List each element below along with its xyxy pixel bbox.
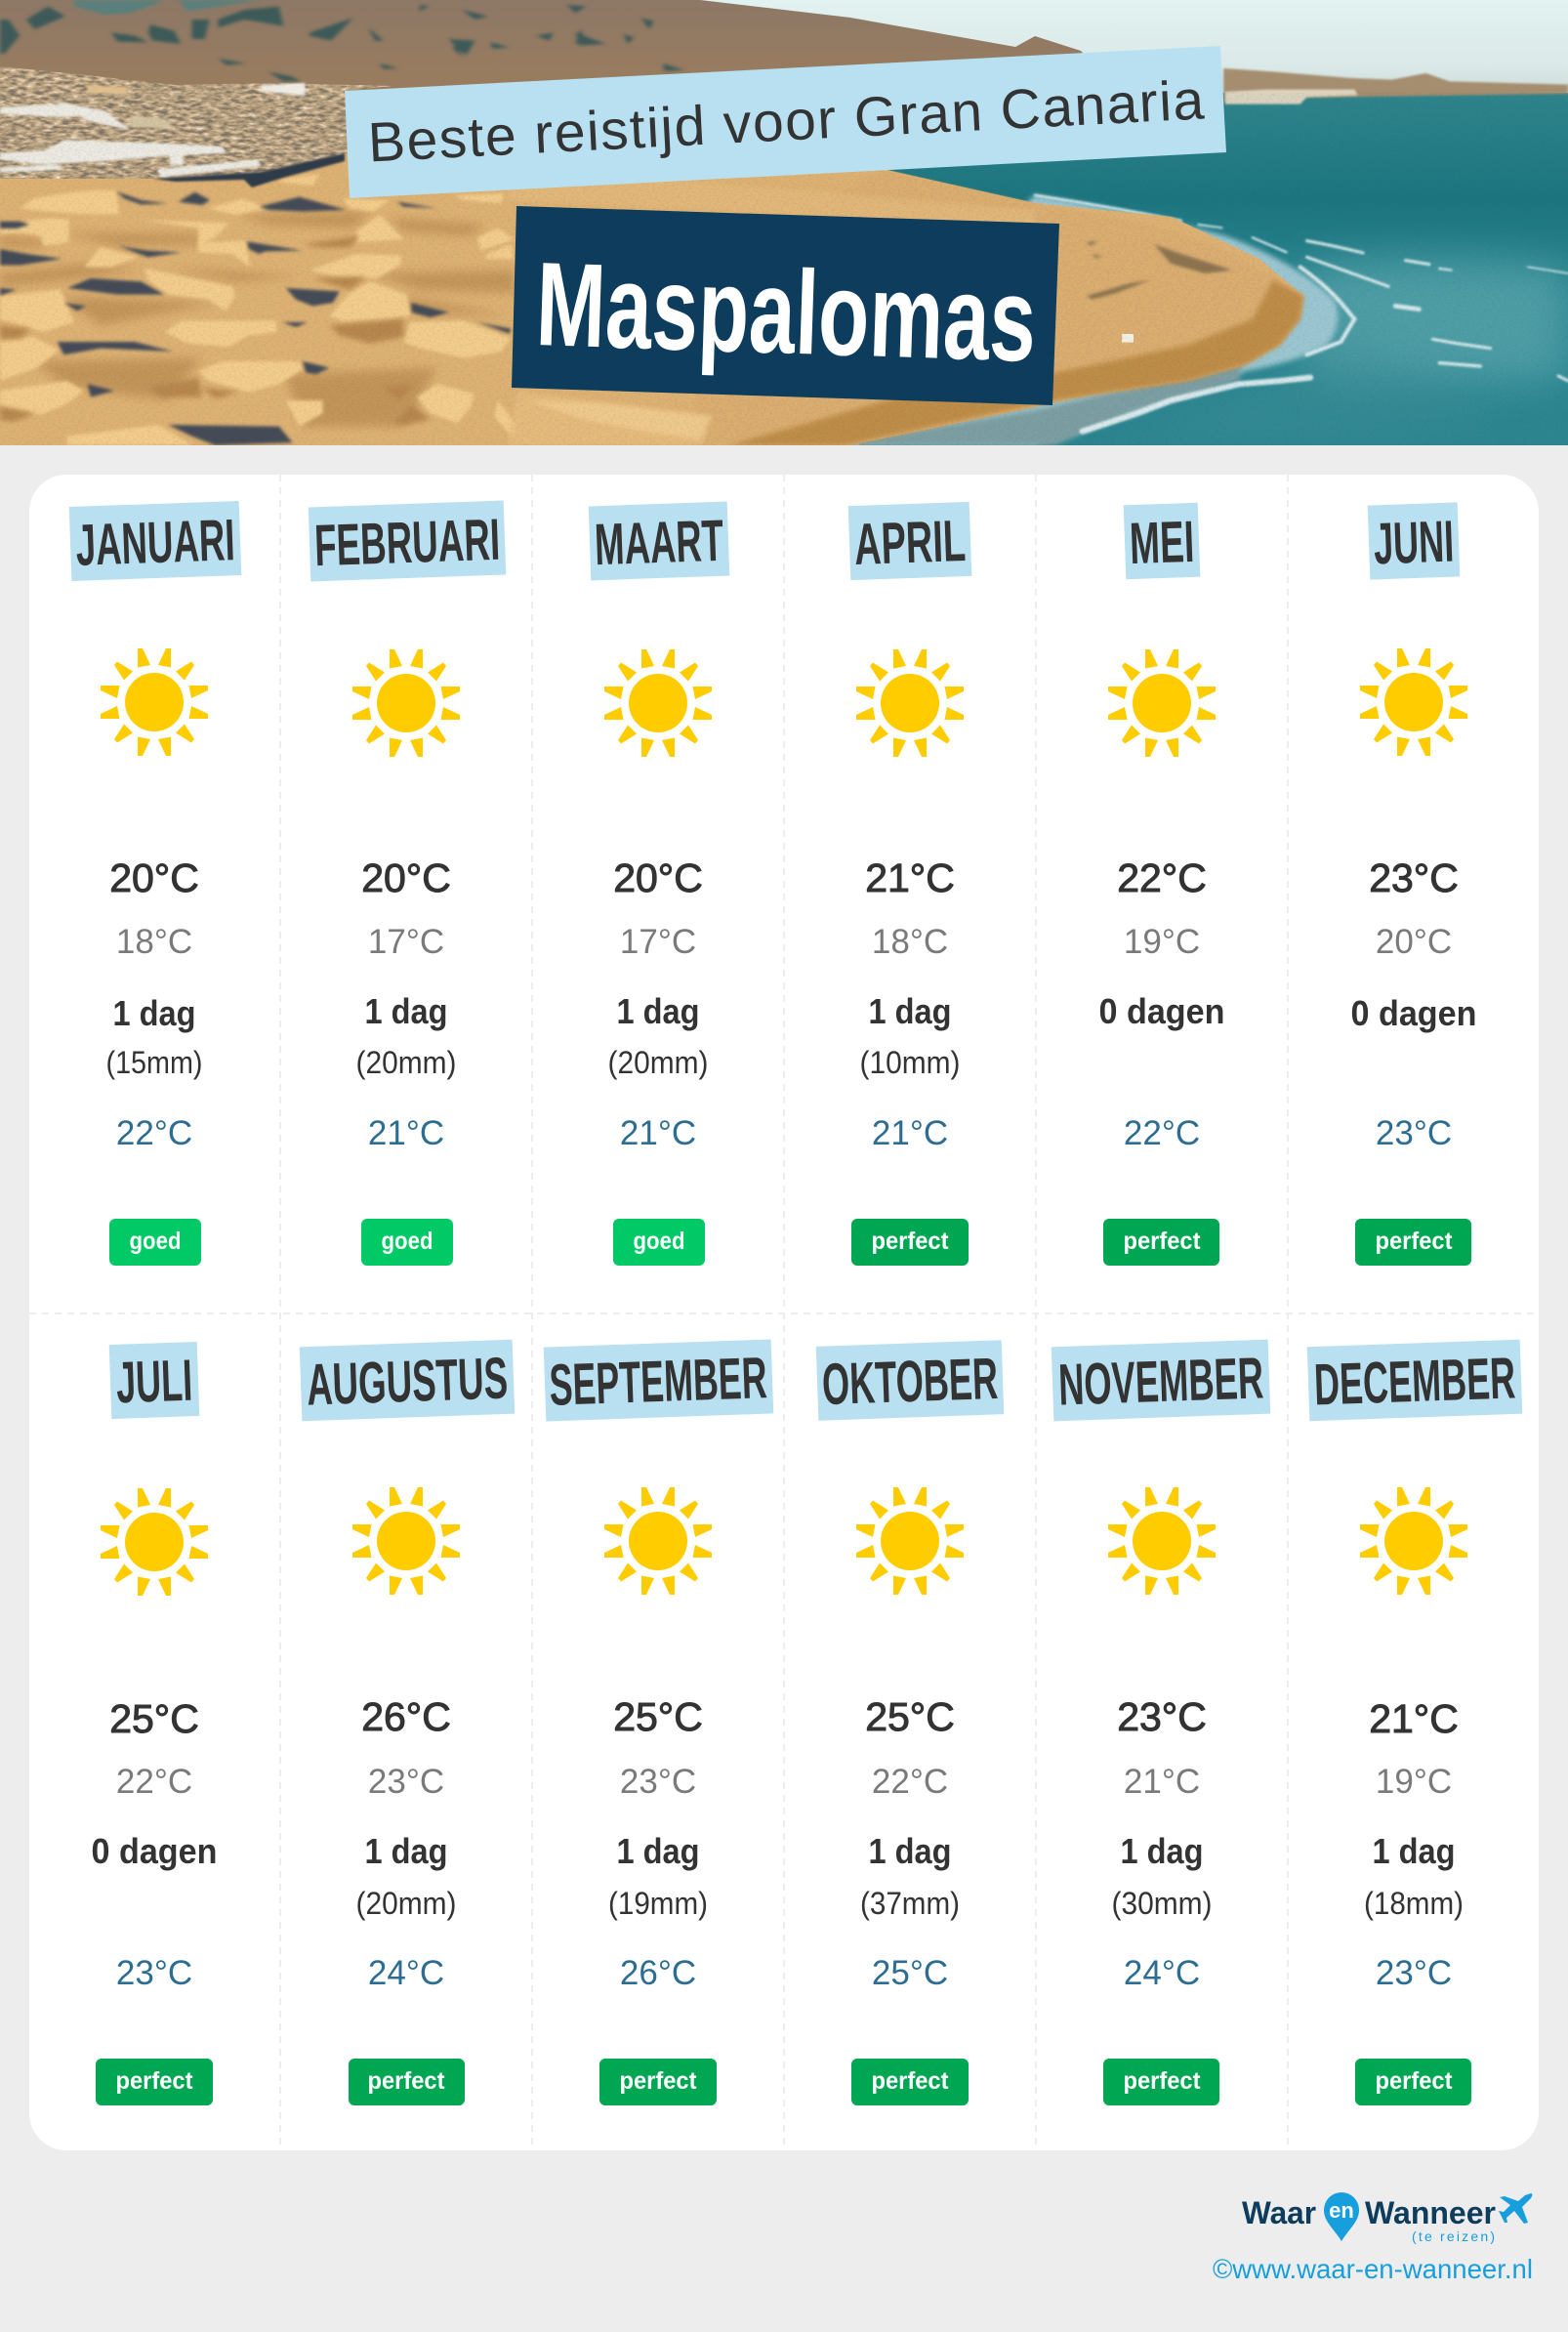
icon: sun bbox=[1108, 1487, 1216, 1595]
sea temperature: 22°C bbox=[1124, 1114, 1200, 1152]
right-hand beach bbox=[695, 169, 1303, 445]
sea temperature: 23°C bbox=[116, 1954, 192, 1992]
rating: perfect: perfect bbox=[1375, 2067, 1453, 2095]
month: juni bbox=[1351, 502, 1476, 1266]
air temperature day: 22°C bbox=[1117, 855, 1207, 900]
rating: perfect bbox=[1103, 1219, 1219, 1266]
month: februari bbox=[309, 501, 506, 1266]
label: maart: MAART bbox=[594, 508, 724, 577]
title banner: Maspalomas bbox=[512, 206, 1059, 405]
icon: sun bbox=[604, 1487, 712, 1595]
sea temperature: 25°C bbox=[872, 1954, 948, 1992]
month: april bbox=[848, 502, 971, 1266]
air temperature night: 19°C bbox=[1376, 1763, 1452, 1801]
label: oktober: OKTOBER bbox=[821, 1346, 999, 1417]
month: september bbox=[544, 1339, 773, 2105]
header photo: Maspalomas dunes and coast bbox=[0, 0, 1568, 445]
rainfall: (37mm) bbox=[860, 1886, 960, 1921]
label: januari bbox=[69, 501, 241, 581]
air temperature day: 21°C bbox=[1369, 1696, 1459, 1741]
label: augustus bbox=[300, 1340, 515, 1421]
label: april bbox=[848, 502, 971, 580]
title banner: Beste reistijd voor Gran Canaria bbox=[345, 46, 1226, 198]
air temperature night: 19°C bbox=[1124, 923, 1200, 961]
logo: Waar en Wanneer bbox=[1242, 2192, 1532, 2244]
mountains bbox=[0, 0, 1084, 105]
air temperature night: 23°C bbox=[368, 1763, 444, 1801]
rating: perfect: perfect bbox=[619, 2067, 697, 2095]
icon: airplane bbox=[1499, 2193, 1532, 2224]
sea temperature: 21°C bbox=[872, 1114, 948, 1152]
air temperature day: 20°C bbox=[361, 855, 451, 900]
icon: location pin bbox=[1324, 2192, 1359, 2241]
rating: perfect bbox=[1355, 2059, 1471, 2105]
label: augustus: AUGUSTUS bbox=[306, 1345, 509, 1418]
rainfall: (18mm) bbox=[1364, 1886, 1464, 1921]
title banner: Beste reistijd voor Gran Canaria: Beste reistijd voor Gran Canaria bbox=[366, 68, 1206, 174]
rain days: 1 dag bbox=[365, 1831, 447, 1871]
rain days: 1 dag bbox=[1121, 1831, 1203, 1871]
distant coast bbox=[1223, 68, 1568, 103]
rating: perfect bbox=[1355, 1219, 1471, 1266]
month: mei bbox=[1099, 503, 1224, 1266]
rain days: 1 dag bbox=[1373, 1831, 1455, 1871]
website url: ©www.waar-en-wanneer.nl bbox=[1213, 2254, 1533, 2284]
rating: perfect bbox=[851, 1219, 969, 1266]
icon: sun bbox=[1360, 1487, 1467, 1595]
air temperature night: 18°C bbox=[872, 923, 948, 961]
air temperature day: 25°C bbox=[109, 1696, 199, 1741]
rating: goed bbox=[109, 1219, 201, 1266]
label: juli bbox=[109, 1342, 199, 1419]
rating: perfect bbox=[1103, 2059, 1219, 2105]
air temperature day: 20°C bbox=[613, 855, 703, 900]
label: februari: FEBRUARI bbox=[313, 507, 501, 578]
rainfall: (19mm) bbox=[608, 1886, 708, 1921]
label: mei: MEI bbox=[1129, 509, 1195, 576]
rain days: 1 dag bbox=[617, 1831, 699, 1871]
rating: goed: goed bbox=[381, 1228, 433, 1255]
sea temperature: 21°C bbox=[368, 1114, 444, 1152]
air temperature day: 20°C bbox=[109, 855, 199, 900]
label: september bbox=[544, 1339, 773, 1422]
rainfall: (20mm) bbox=[355, 1886, 457, 1921]
icon: sun bbox=[1108, 649, 1216, 757]
rating: goed bbox=[613, 1219, 705, 1266]
month: januari bbox=[69, 501, 241, 1266]
rating: perfect bbox=[851, 2059, 969, 2105]
rating: perfect: perfect bbox=[871, 2067, 949, 2095]
title banner: Maspalomas: Maspalomas bbox=[534, 237, 1038, 387]
label: november bbox=[1052, 1340, 1270, 1421]
sea temperature: 21°C bbox=[620, 1114, 696, 1152]
rating: perfect: perfect bbox=[367, 2067, 445, 2095]
rating: perfect: perfect bbox=[1123, 1228, 1201, 1255]
rain days: 1 dag bbox=[869, 1831, 951, 1871]
photo grain bbox=[0, 93, 1568, 445]
label: september: SEPTEMBER bbox=[548, 1345, 768, 1418]
label: juni bbox=[1368, 502, 1460, 580]
air temperature day: 23°C bbox=[1369, 855, 1459, 900]
icon: sun bbox=[1360, 648, 1467, 756]
rainfall: (10mm) bbox=[859, 1045, 961, 1080]
logo: Waar en Wanneer: Wanneer bbox=[1365, 2195, 1496, 2230]
sea temperature: 24°C bbox=[1124, 1954, 1200, 1992]
rain days: 0 dagen bbox=[1351, 993, 1476, 1033]
air temperature day: 23°C bbox=[1117, 1694, 1207, 1739]
sea temperature: 23°C bbox=[1376, 1954, 1452, 1992]
rainfall: (30mm) bbox=[1111, 1886, 1213, 1921]
icon: sun bbox=[856, 649, 964, 757]
icon: location pin: en bbox=[1329, 2198, 1354, 2223]
air temperature day: 25°C bbox=[865, 1694, 955, 1739]
rain days: 1 dag bbox=[113, 993, 195, 1033]
white surf lines bbox=[1035, 195, 1568, 432]
rating: goed: goed bbox=[633, 1228, 685, 1255]
air temperature night: 17°C bbox=[620, 923, 696, 961]
icon: sun bbox=[604, 649, 712, 757]
label: juli: JULI bbox=[115, 1348, 193, 1415]
dunes bbox=[0, 146, 1303, 445]
air temperature night: 20°C bbox=[1376, 923, 1452, 961]
rating: perfect: perfect bbox=[871, 1228, 949, 1255]
shallow water bbox=[831, 195, 1338, 445]
rainfall: (20mm) bbox=[355, 1045, 457, 1080]
icon: sun bbox=[352, 649, 460, 757]
month: maart bbox=[589, 502, 729, 1266]
icon: sun bbox=[856, 1487, 964, 1595]
rain days: 1 dag bbox=[617, 991, 699, 1031]
month: juli bbox=[92, 1342, 217, 2105]
month: augustus bbox=[300, 1340, 515, 2105]
label: maart bbox=[589, 502, 729, 580]
rain days: 0 dagen bbox=[1099, 991, 1224, 1031]
rating: perfect: perfect bbox=[1123, 2067, 1201, 2095]
rating: perfect: perfect bbox=[115, 2067, 193, 2095]
sea temperature: 23°C bbox=[1376, 1114, 1452, 1152]
rating: perfect bbox=[599, 2059, 717, 2105]
air temperature night: 22°C bbox=[116, 1763, 192, 1801]
panel: monthly climate card bbox=[29, 475, 1539, 2150]
sea temperature: 24°C bbox=[368, 1954, 444, 1992]
icon: sun bbox=[101, 648, 208, 756]
month: november bbox=[1052, 1340, 1270, 2105]
label: oktober bbox=[816, 1340, 1004, 1421]
rain days: 0 dagen bbox=[92, 1831, 217, 1871]
air temperature night: 23°C bbox=[620, 1763, 696, 1801]
rating: perfect bbox=[96, 2059, 213, 2105]
month: oktober bbox=[816, 1340, 1004, 2105]
rain days: 1 dag bbox=[869, 991, 951, 1031]
rating: perfect bbox=[349, 2059, 465, 2105]
rain days: 1 dag bbox=[365, 991, 447, 1031]
icon: sun bbox=[352, 1487, 460, 1595]
air temperature night: 21°C bbox=[1124, 1763, 1200, 1801]
month: december bbox=[1307, 1340, 1522, 2105]
town bbox=[0, 66, 391, 179]
air temperature night: 17°C bbox=[368, 923, 444, 961]
logo: Waar en Wanneer: Waar bbox=[1242, 2195, 1316, 2230]
air temperature day: 21°C bbox=[865, 855, 955, 900]
sea temperature: 26°C bbox=[620, 1954, 696, 1992]
rainfall: (20mm) bbox=[607, 1045, 709, 1080]
air temperature night: 18°C bbox=[116, 923, 192, 961]
sea temperature: 22°C bbox=[116, 1114, 192, 1152]
rainfall: (15mm) bbox=[105, 1045, 203, 1080]
label: mei bbox=[1124, 503, 1200, 579]
label: februari bbox=[309, 501, 506, 581]
icon: sun bbox=[101, 1488, 208, 1596]
air temperature day: 25°C bbox=[613, 1694, 703, 1739]
rating: goed: goed bbox=[129, 1228, 182, 1255]
rating: goed bbox=[361, 1219, 453, 1266]
logo: Waar en Wanneer: (te reizen) bbox=[1412, 2228, 1495, 2244]
label: november: NOVEMBER bbox=[1057, 1345, 1264, 1418]
label: april: APRIL bbox=[853, 508, 967, 577]
air temperature day: 26°C bbox=[361, 1694, 451, 1739]
label: juni: JUNI bbox=[1373, 509, 1455, 576]
air temperature night: 22°C bbox=[872, 1763, 948, 1801]
rating: perfect: perfect bbox=[1375, 1228, 1453, 1255]
label: januari: JANUARI bbox=[74, 507, 236, 578]
